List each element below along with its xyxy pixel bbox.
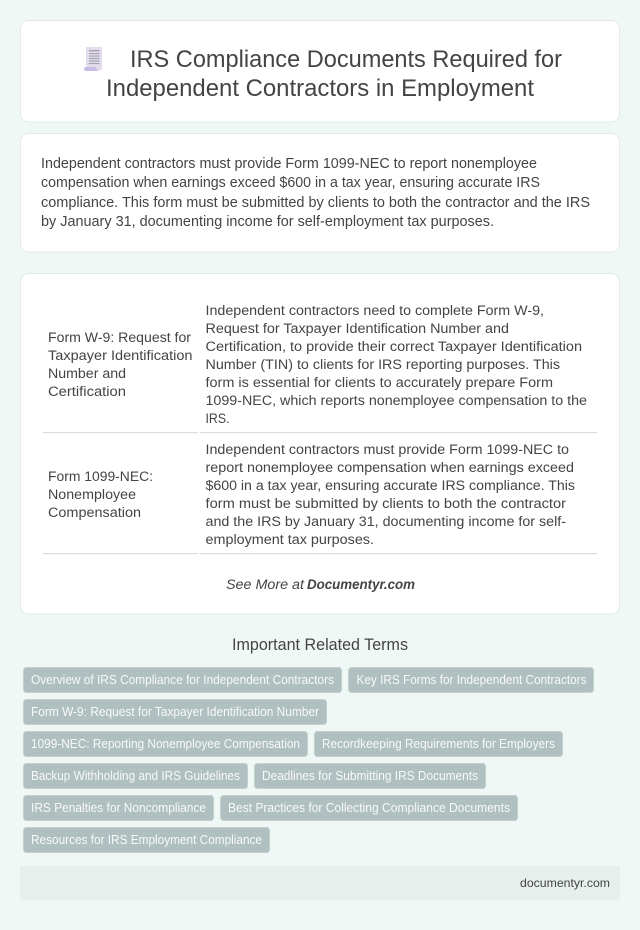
chip: resources <box>24 828 270 852</box>
related terms chips <box>24 668 594 852</box>
see more link: See More at <box>226 577 305 593</box>
title: Independent Contractors in Employment <box>106 75 534 102</box>
row description: Form W-9 <box>206 303 587 427</box>
chip: form W-9 <box>24 700 326 724</box>
row description: Form 1099-NEC: employment tax purposes. <box>206 532 374 548</box>
row description: Form W-9: Independent contractors need to complete Form W-9, <box>206 303 544 319</box>
see more link: Documentyr.com <box>307 577 415 593</box>
summary text: by January 31, documenting income for self-employment tax purposes. <box>41 214 494 230</box>
summary text <box>41 156 590 230</box>
chip: form W-9: Form W-9: Request for Taxpayer Identification Number <box>31 705 319 719</box>
footer <box>20 866 620 900</box>
row description: Form 1099-NEC: $600 in a tax year, ensuring accurate IRS compliance. This <box>206 478 575 494</box>
row description: Form W-9: Number (TIN) to clients for IRS reporting purposes. This <box>206 357 560 373</box>
chip: best practices <box>220 796 518 820</box>
summary text: Independent contractors must provide Form 1099-NEC to report nonemployee <box>41 156 537 172</box>
chip: key forms <box>348 668 594 692</box>
title: IRS Compliance Documents Required for <box>130 46 562 73</box>
footer: documentyr.com <box>520 876 610 890</box>
chip: best practices: Best Practices for Collecting Compliance Documents <box>228 801 510 815</box>
row description: Form 1099-NEC <box>206 442 575 548</box>
row description: Form W-9: 1099-NEC, which reports nonemployee compensation to the <box>206 393 587 409</box>
panel: title card <box>20 20 620 122</box>
row description: Form 1099-NEC: and the IRS by January 31, documenting income for self- <box>206 514 566 530</box>
chip: deadlines <box>254 764 486 788</box>
row description: Form W-9: IRS. <box>206 411 230 427</box>
chip: 1099-NEC <box>24 732 308 756</box>
chip: penalties <box>24 796 214 820</box>
row description: Form 1099-NEC: report nonemployee compensation when earnings exceed <box>206 460 574 476</box>
row description: Form 1099-NEC: Independent contractors must provide Form 1099-NEC to <box>206 442 569 458</box>
row description: Form W-9: Certification, to provide their correct Taxpayer Identification <box>206 339 582 355</box>
chip: 1099-NEC: 1099-NEC: Reporting Nonemployee Compensation <box>31 737 300 751</box>
chip: backup withholding <box>24 764 248 788</box>
chip: penalties: IRS Penalties for Noncompliance <box>31 801 206 815</box>
summary text: compliance. This form must be submitted by clients to both the contractor and the IRS <box>41 195 590 211</box>
panel: forms table card <box>20 274 620 614</box>
row heading: Form W-9: Form W-9: Request for <box>48 330 191 346</box>
chip: deadlines: Deadlines for Submitting IRS Documents <box>262 769 478 783</box>
chip: recordkeeping <box>314 732 562 756</box>
row description: Form W-9: form is essential for clients to accurately prepare Form <box>206 375 553 391</box>
row heading: Form W-9: Taxpayer Identification <box>48 348 192 364</box>
see more link <box>226 577 415 593</box>
chip: backup withholding: Backup Withholding and IRS Guidelines <box>31 769 240 783</box>
row heading: Form W-9: Number and <box>48 366 126 382</box>
row: Form 1099-NEC <box>48 442 575 548</box>
chip: resources: Resources for IRS Employment Compliance <box>31 833 262 847</box>
title <box>106 46 562 102</box>
icon: document scroll <box>84 47 102 71</box>
row heading: Form 1099-NEC <box>48 469 153 521</box>
row description: Form 1099-NEC: form must be submitted by clients to both the contractor <box>206 496 566 512</box>
chip: overview <box>24 668 342 692</box>
row heading: Form W-9: Certification <box>48 384 126 400</box>
row heading: Form 1099-NEC: Nonemployee <box>48 487 136 503</box>
row heading: Form 1099-NEC: Compensation <box>48 505 141 521</box>
row description: Form W-9: Request for Taxpayer Identification Number and <box>206 321 509 337</box>
heading: important related terms: Important Related Terms <box>232 636 408 654</box>
row: Form W-9 <box>48 303 587 427</box>
panel: summary card <box>20 134 620 252</box>
summary text: compensation when earnings exceed $600 in a tax year, ensuring accurate IRS <box>41 175 540 191</box>
chip: recordkeeping: Recordkeeping Requirements for Employers <box>322 737 555 751</box>
row heading: Form 1099-NEC: Form 1099-NEC: <box>48 469 153 485</box>
row heading: Form W-9 <box>48 330 192 400</box>
chip: overview: Overview of IRS Compliance for Independent Contractors <box>31 673 334 687</box>
chip: key forms: Key IRS Forms for Independent Contractors <box>356 673 586 687</box>
